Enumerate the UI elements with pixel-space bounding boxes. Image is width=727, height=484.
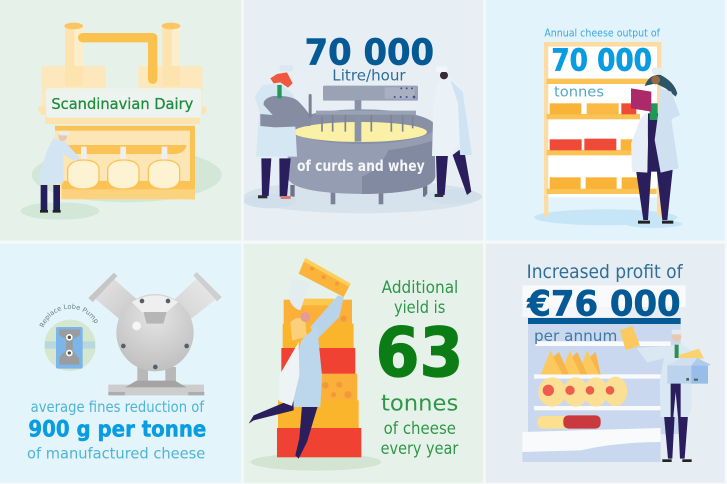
panel: annual cheese output	[486, 0, 725, 241]
heading: 70 000: 70 000	[305, 32, 434, 73]
text: Annual cheese output of: Annual cheese output of	[544, 28, 660, 40]
chart: cheese shelf	[544, 42, 661, 217]
text: tonnes: tonnes	[554, 85, 604, 101]
text: Additional: Additional	[382, 278, 458, 297]
text: Replace Lobe Pump: Replace Lobe Pump	[40, 304, 98, 328]
panel: 70 000 litre per hour	[244, 0, 483, 241]
text: of curds and whey: of curds and whey	[297, 158, 425, 175]
label: Scandinavian Dairy: Scandinavian Dairy	[51, 95, 193, 113]
text: average fines reduction of: average fines reduction of	[31, 399, 205, 416]
text: per annum: per annum	[534, 328, 617, 345]
icon: lobe pump	[88, 272, 222, 395]
text: every year: every year	[381, 439, 458, 458]
heading: 70 000: 70 000	[551, 44, 652, 79]
heading: €76 000: €76 000	[526, 284, 681, 324]
icon: curd vat	[287, 86, 435, 204]
text: 900 g per tonne: 900 g per tonne	[28, 418, 206, 443]
icon: woman reading	[631, 68, 680, 224]
panel: fines reduction	[0, 244, 242, 482]
text: tonnes: tonnes	[381, 392, 458, 417]
text: Litre/hour: Litre/hour	[332, 67, 407, 84]
chart: cheese stack	[277, 258, 361, 457]
icon: worker with box	[620, 326, 711, 462]
icon: left worker	[244, 65, 313, 208]
panel: additional yield	[244, 244, 483, 483]
text: of cheese: of cheese	[384, 419, 456, 438]
icon: worker	[38, 131, 80, 213]
panel: Scandinavian Dairy	[0, 0, 241, 241]
label: Scandinavian Dairy	[46, 88, 201, 118]
chart: supermarket shelf	[522, 285, 686, 462]
icon: right worker	[425, 67, 482, 204]
text: of manufactured cheese: of manufactured cheese	[27, 445, 205, 462]
icon: dairy plant	[38, 23, 207, 199]
icon: lobe pump diagram	[40, 304, 98, 371]
heading: 63: 63	[376, 314, 463, 393]
text: yield is: yield is	[394, 298, 445, 317]
panel: increased profit	[486, 244, 725, 483]
icon: woman lifting cheese	[249, 279, 344, 459]
text: Increased profit of: Increased profit of	[527, 261, 684, 283]
